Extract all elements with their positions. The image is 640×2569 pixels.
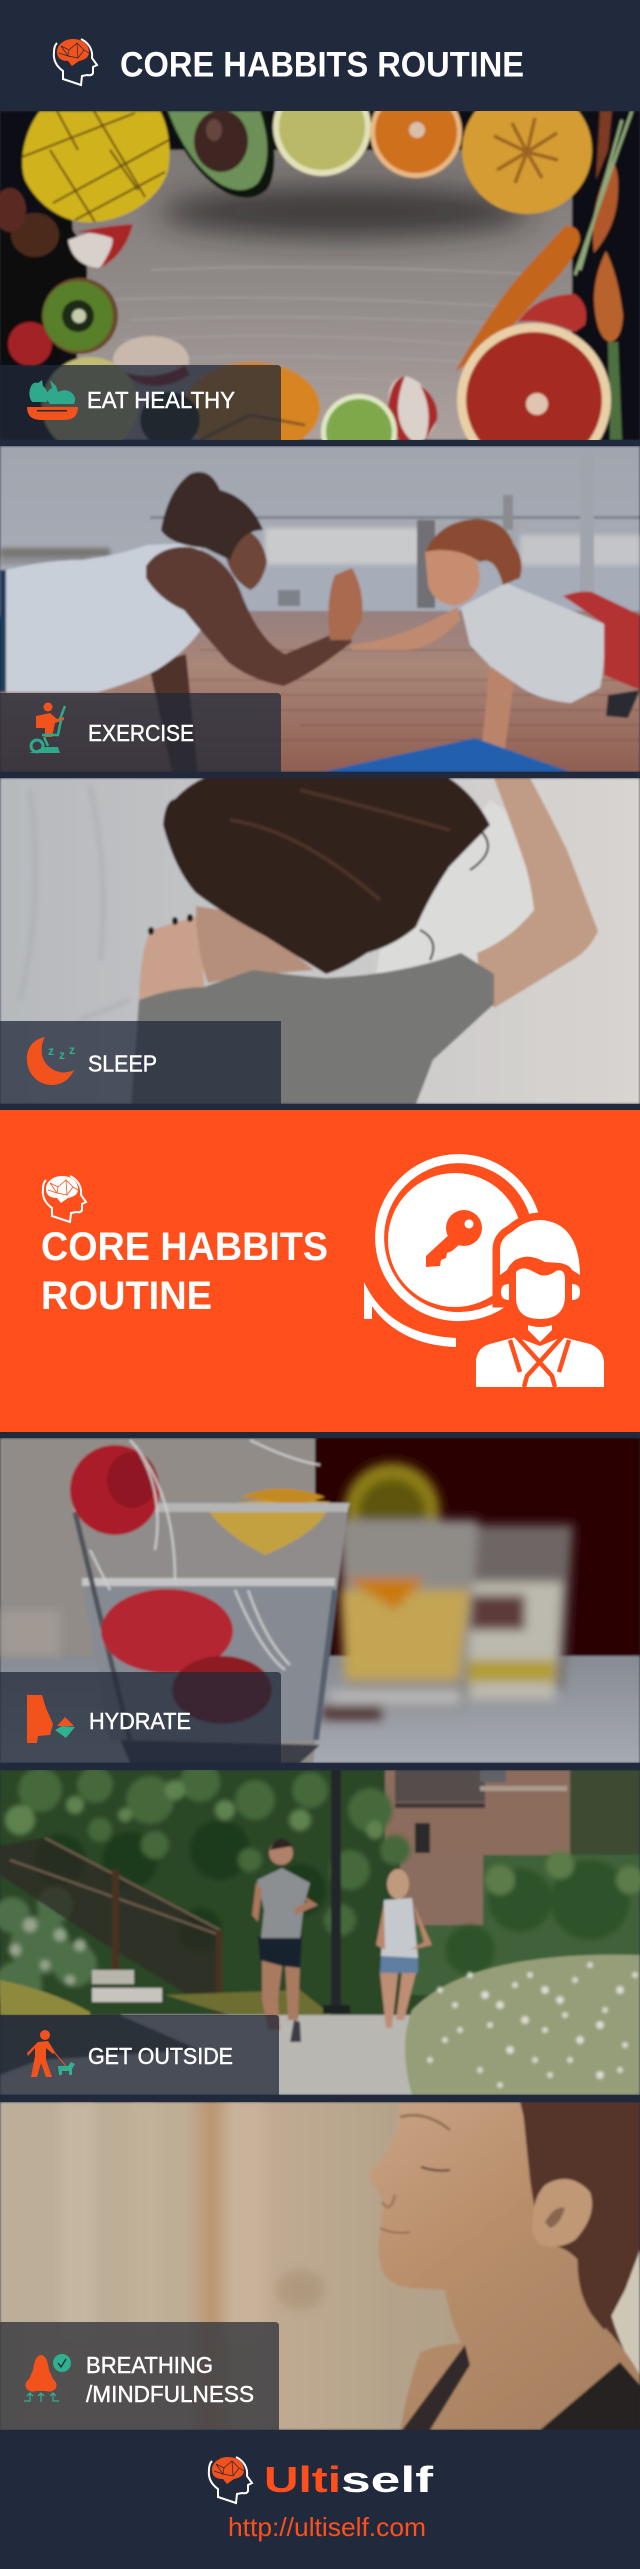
banner title: [41, 1225, 328, 1318]
panel: exercise: [0, 446, 640, 772]
icon: moon with zzz: z: [69, 1043, 75, 1057]
photo: two people jogging in park: [0, 1762, 640, 2095]
kiwi: [42, 278, 118, 354]
icon: exercise bike: [29, 702, 65, 753]
woman: [380, 1973, 416, 2028]
icon: banner brain head logo: [43, 1176, 86, 1222]
label: exercise: EXERCISE: [88, 720, 194, 746]
icon: moon with zzz: [27, 1037, 75, 1085]
photo: glasses of water with fruit: [0, 1438, 640, 1763]
label box: eat healthy: [0, 365, 281, 440]
banner title: ROUTINE: [41, 1274, 212, 1318]
icon: footer brain head logo: [209, 2457, 252, 2503]
photo: woman breathing with eyes closed: [0, 2102, 640, 2430]
lemon and orange under label: [40, 356, 136, 440]
panel: core habits banner: [0, 1110, 640, 1432]
banner title: CORE HABBITS: [41, 1225, 328, 1269]
panel: hydrate: [0, 1438, 640, 1763]
label: sleep: SLEEP: [88, 1050, 157, 1076]
avocado: [165, 111, 274, 198]
label box: get outside: [0, 2015, 279, 2095]
icon: header brain head logo: [54, 39, 97, 85]
icon: key in circle with person: [364, 1159, 604, 1387]
strawberries: [518, 294, 586, 332]
title: CORE HABBITS ROUTINE: [120, 46, 524, 84]
label: breathing mindfulness: [86, 2352, 254, 2407]
carrots: [596, 111, 612, 180]
panel: breathing: [0, 2102, 640, 2430]
mango: [22, 111, 170, 222]
photo: woman sleeping on bed: [0, 778, 640, 1104]
label box: sleep: [0, 1021, 281, 1104]
label: hydrate: HYDRATE: [89, 1708, 191, 1734]
yoga mat: [322, 738, 571, 772]
persimmon: [460, 111, 594, 216]
label: get outside: GET OUTSIDE: [88, 2043, 233, 2069]
icon: nose with check and arrows: [24, 2354, 71, 2402]
label box: exercise: [0, 693, 281, 772]
right woman: [350, 607, 461, 650]
footer brand name: [264, 2459, 434, 2500]
lemon: [270, 111, 372, 178]
panel: eat healthy: [0, 111, 640, 440]
panel: sleep: [0, 778, 640, 1104]
grapefruit: [456, 322, 613, 440]
icon: salad bowl: [27, 380, 78, 420]
icon: moon with zzz: z: [48, 1044, 54, 1058]
label: breathing mindfulness: BREATHING: [86, 2352, 213, 2378]
man: [262, 1960, 300, 2030]
panel: get outside: [0, 1762, 640, 2095]
footer brand name: self: [341, 2459, 434, 2500]
icon: drinking face with drop: [27, 1695, 75, 1743]
photo: two women high five: [0, 446, 640, 772]
label box: hydrate: [0, 1672, 281, 1763]
label box: breathing: [0, 2322, 279, 2430]
label: eat healthy: EAT HEALTHY: [87, 387, 235, 413]
left woman: [149, 654, 198, 772]
footer brand name: Ulti: [264, 2459, 341, 2500]
lime: [320, 392, 399, 440]
footer band: [0, 2430, 640, 2569]
label: breathing mindfulness: /MINDFULNESS: [86, 2381, 254, 2407]
footer url: http://ultiself.com: [228, 2512, 426, 2542]
header band: [0, 0, 640, 111]
icon: person walking dog: [27, 2030, 75, 2077]
icon: moon with zzz: z: [59, 1048, 65, 1062]
orange half: [369, 111, 464, 180]
photo: fruit on chopping board: [0, 111, 640, 440]
